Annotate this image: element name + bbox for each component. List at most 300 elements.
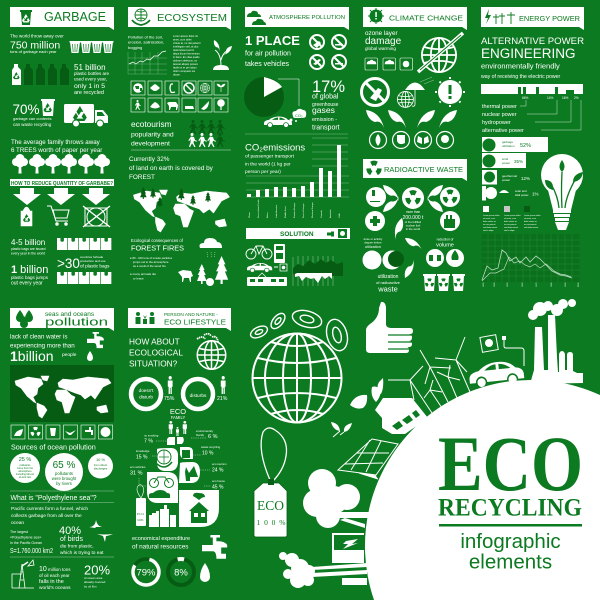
chart: doesn't disturb ring: 75%: [164, 396, 175, 402]
legend: Lorem ipsum dolor: [504, 215, 521, 217]
text: co2 emissions: in the world (1 kg per: [245, 162, 291, 168]
heading: eco lifestyle: [128, 308, 231, 331]
chart labels: Western Europe: [311, 201, 314, 218]
text: power list: hydropower: [482, 120, 511, 126]
chart: emissions grid and bars: [245, 134, 349, 197]
icon: truck: [64, 104, 108, 127]
text: ozone: ozone layer: [365, 30, 398, 37]
legend: Lorem ipsum dolor: [524, 215, 541, 217]
text: expenditure: of natural resources: [132, 544, 188, 550]
text: pollution: erosion, salinization,: [128, 40, 164, 44]
text: polyethylene sea: [10, 491, 114, 557]
icon: big tap: [200, 535, 227, 582]
chart: pollution circles: 65 %: [53, 460, 76, 471]
icon: bike: [246, 246, 272, 259]
chart: energy bars: 52%: [520, 143, 531, 149]
icon: weather tiles: [365, 58, 412, 70]
icon: eco tag small: [136, 485, 146, 526]
icon: organ circles: [370, 132, 454, 148]
text: oil: 20%: [84, 562, 110, 578]
text: polyethylene sea: S=1.760.000 km2: [10, 548, 53, 555]
legend: sed deterruisset: [524, 226, 539, 229]
legend: sit amet, cum: [524, 217, 536, 220]
text: forest fires: ● 80 - 100 tons of smoke particles: [130, 256, 173, 260]
chart: lifestyle labels: no smoking: [144, 434, 159, 438]
text: 51 billion: are recycled: [74, 90, 104, 96]
text: 51 billion: only 1 in 5: [74, 83, 105, 90]
legend: Lorem ipsum dolor: [483, 215, 500, 217]
text: pollution: bogging: [128, 45, 142, 50]
chart: donut 79%: 79%: [136, 568, 156, 578]
text: power list: [482, 104, 524, 134]
text: lorem: intellegam sed, at duo: [173, 44, 199, 48]
chart: lifestyle labels: 7 %: [144, 438, 153, 444]
chart: lifestyle labels: eco tourism: [212, 462, 227, 466]
chart: energy lines: 1900: [483, 282, 485, 287]
text: 17%: transport: [312, 124, 340, 132]
text: co2 emissions: person per year): [245, 169, 281, 175]
text: more than: [403, 210, 424, 231]
chart: lifestyle labels: eco vehicles: [130, 465, 146, 469]
chart: donut 8%: [165, 556, 197, 588]
heading: garbage: GARBAGE: [44, 10, 106, 24]
text: forest: [129, 156, 214, 181]
panel: person and nature: [128, 308, 231, 588]
title: recycling: RECYCLING: [438, 494, 582, 522]
chart: pollution circles: discharges: [94, 466, 108, 470]
icon: hikers: [188, 120, 225, 147]
chart: lifestyle labels: eco house: [212, 479, 225, 483]
chart: energy bars: 12%: [521, 176, 530, 181]
text: oil: falls in the: [39, 579, 64, 585]
panel: eco recycling hero: [249, 299, 600, 600]
chart labels: Australia: [329, 209, 332, 218]
heading: energy: [481, 7, 584, 30]
icon: globe butterflies: [197, 334, 226, 369]
legend: sit amet, cum: [504, 217, 516, 220]
text: sources: Sources of ocean pollution: [11, 442, 96, 452]
chart: energy bars: geothermal: [502, 174, 517, 178]
icon: wind turbines: [388, 337, 470, 413]
text: 17%: 17%: [312, 78, 345, 96]
icon: eco tag: ECO: [257, 499, 284, 514]
text: bags stats: 1 billion: [11, 264, 48, 276]
text: lorem: [173, 34, 201, 76]
chart: energy bars: wind: [502, 157, 509, 161]
chart: disturbs ring: [183, 376, 228, 409]
text: oil: world's oceans: [39, 585, 71, 591]
text: 70%: can waste recycling: [13, 122, 52, 127]
text: utilization: dose or activity: [364, 237, 383, 241]
chart labels: Eastern Europe: [293, 202, 296, 218]
icon: house: [375, 398, 428, 434]
chart: pollution circles: 10 %: [96, 457, 105, 462]
text: lorem: aliqui dicunt fermentum: [173, 52, 200, 56]
chart: disturbs ring: disturbs: [190, 393, 207, 399]
text: how about: [129, 336, 183, 368]
icon: leaves: [331, 378, 383, 437]
text: ecotourism: development: [131, 140, 170, 148]
chart: lifestyle labels: friendly: [196, 434, 205, 437]
legend: sed in aliqui: [483, 230, 494, 232]
text: power list: thermal power: [482, 104, 517, 110]
icon: large globe: [252, 334, 342, 422]
chart: energy bars: power: [502, 161, 510, 165]
icon: factory smoke: [279, 552, 367, 588]
icon: can: [41, 99, 55, 116]
legend: sit amet, cum: [483, 217, 495, 220]
text: polyethylene sea: The largest: [10, 530, 28, 534]
icon: butterflies: [249, 307, 351, 353]
chart: energy lines: 1960: [522, 282, 524, 287]
chart: energy bars: [482, 137, 548, 200]
text: oil: already covered: [84, 580, 106, 584]
chart: disturbs ring: 21%: [217, 396, 228, 402]
text: polyethylene sea: Pacific currents form a funnel, which: [11, 506, 88, 512]
icon: eco tag small: ECO: [137, 512, 144, 516]
icon grid: [131, 81, 228, 112]
text: co2 emissions: of passenger transport: [245, 154, 295, 160]
legend: no nisi petenti: [504, 223, 517, 226]
white circle: [365, 380, 600, 600]
chart: energy bars: 1%: [532, 192, 539, 196]
text: 750 million: 750 million: [10, 40, 60, 52]
icon: tap: [87, 332, 104, 361]
chart: lifestyle labels: waste recycling: [201, 445, 221, 449]
text: lorem: dolorum delectus, no: [173, 58, 198, 62]
panel: radioactive waste: [362, 159, 467, 294]
text: 51 billion: 51 billion: [74, 63, 106, 72]
icon: cloud and trees: [178, 238, 228, 286]
chart: energy lines: 1920: [494, 282, 496, 287]
chart: pollution circles: from direct: [94, 463, 107, 467]
divider: [439, 524, 582, 526]
text: 750 million: The world throw away over: [10, 34, 64, 38]
chart: lifestyle labels: 24 %: [212, 468, 224, 474]
icon: thumbs up: [366, 302, 413, 353]
text: polyethylene sea: in the Pacific Ocean: [10, 541, 42, 545]
legend: dolet virtute at,: [483, 220, 497, 223]
text: 17%: gases: [312, 105, 335, 115]
chart: pollution circles: pollutants: [20, 464, 31, 467]
icon: leaf arrows: [366, 110, 457, 128]
text: pollution: [128, 34, 164, 50]
legend: sed in aliqui: [504, 230, 515, 232]
band: solution: SOLUTION: [280, 231, 314, 238]
chart: lifestyle labels: 31 %: [130, 470, 143, 476]
text: co2 emissions: [245, 142, 305, 175]
text: alternative power: environmentally friendly: [481, 62, 560, 70]
chart: pollution circles: of acid rain: [19, 476, 32, 479]
chart: pollution circles: come from the: [17, 467, 34, 470]
icon: factory: [528, 299, 583, 384]
text: lorem: Lorem ipsum dolor sit: [173, 34, 198, 38]
text: how about: ECOLOGICAL: [129, 348, 183, 358]
text: lorem: virtute at, no nisi petenti: [173, 41, 201, 45]
text: more than: more than: [406, 210, 420, 214]
icon: volume circles: [426, 249, 464, 267]
chart: energy lines: 1970: [536, 282, 538, 287]
map: world: [10, 365, 114, 422]
heading: atmosphere: [245, 7, 349, 30]
icon: birds: [89, 520, 113, 542]
panel: ecosystem: [128, 7, 232, 286]
text: lorem: laoreet aliquip ponere: [173, 62, 199, 66]
text: clean water: lack of clean water is: [10, 334, 67, 340]
text: bags stats: [11, 238, 110, 286]
text: bags stats: plastic bags are issued: [11, 247, 46, 251]
text: ozone: damage: [365, 36, 402, 47]
text: utilization: utilization: [378, 274, 399, 280]
chart: energy bars: utilization: [502, 144, 515, 148]
text: utilization: degree before: [364, 240, 382, 244]
text: oil: of oil each year: [39, 573, 70, 578]
text: polyethylene sea: «Polyethylene sea»: [10, 536, 41, 540]
icon: power plant: [332, 533, 364, 563]
chart labels: [249, 198, 341, 218]
chart: solution: [293, 256, 343, 286]
icon: no aerosol: [362, 78, 388, 106]
text: ecotourism: popularity and: [131, 132, 174, 138]
text: utilization: of radioactive: [376, 280, 401, 285]
text: 17%: greenhouse: [312, 102, 339, 108]
text: six trees: The average family throws away: [11, 139, 101, 146]
band: how to reduce: HOW TO REDUCE QUANTITY OF GARBABE?: [11, 181, 114, 187]
chart: energy lines: [482, 234, 580, 287]
text: oil: 10 million tons: [39, 566, 71, 573]
chart: doesn't disturb ring: disturb: [139, 394, 153, 400]
text: forest fires: ● many animals die: [130, 272, 156, 276]
text: 51 billion: [74, 63, 110, 96]
text: alternative power: ALTERNATIVE POWER: [481, 36, 584, 47]
text: expenditure: economical expenditure: [132, 536, 190, 542]
chart: pollution circles: [10, 453, 113, 491]
chart: energy lines: 1980: [551, 282, 553, 287]
chart: pollution circles: were brought: [52, 476, 77, 481]
subtitle: infographic elements: elements: [469, 550, 552, 574]
text: how about: HOW ABOUT: [129, 336, 180, 346]
text: alternative power: ENGINEERING: [481, 46, 576, 61]
icon: bulb: [541, 154, 583, 230]
text: eco family: [170, 407, 186, 420]
icon: moon circles: [362, 250, 404, 270]
text: 40% of birds: which is trying to eat: [60, 550, 104, 556]
text: 17%: emission -: [312, 117, 337, 123]
chart: energy bars: garbage: [502, 140, 513, 144]
text: forest fires: as a result of the wood fire: [133, 264, 166, 268]
text: ecotourism: ecotourism: [131, 119, 172, 129]
text: clean water: 1billion: [10, 348, 54, 364]
chart labels: Rest of Europe: [302, 203, 305, 218]
heading: seas: seas and oceans: [45, 311, 95, 318]
icon: solar panel: [338, 439, 398, 479]
chart: lifestyle labels: environmentaly: [196, 430, 214, 433]
text: 17%: [312, 78, 345, 132]
icon: plastic bags: [57, 238, 111, 284]
text: bags stats: >30: [57, 256, 80, 271]
text: forest fires: jumps out to the atmosphere: [132, 260, 169, 264]
text: 51 billion: used every year,: [74, 76, 107, 82]
text: alternative power: way of receiving the electric power: [481, 74, 561, 80]
icon: eco tag: [254, 428, 287, 537]
legend: sed deterruisset: [504, 226, 519, 229]
band: solution: [246, 228, 350, 239]
text: ozone: [365, 30, 402, 51]
chart: donut 79%: [130, 556, 162, 588]
text: more than: nuclear fuel: [406, 224, 421, 228]
chart: pollution circles: atmosphere: [18, 470, 32, 473]
text: oil: [39, 562, 110, 591]
chart: doesn't disturb ring: [131, 376, 175, 409]
text: lorem: deterruisset sed in: [173, 48, 195, 52]
icon: co2 cloud: CO₂: [295, 113, 303, 118]
text: forest: FOREST: [129, 174, 155, 181]
chart labels: China: [249, 212, 251, 218]
chart: pollution circles: by rivers: [56, 481, 72, 486]
text: lorem: in bans. Ex vitae qualis: [173, 55, 200, 59]
text: 70%: 70%: [12, 102, 40, 117]
heading: eco lifestyle: ECO LIFESTYLE: [164, 320, 226, 326]
text: oil: by oil film: [84, 584, 97, 588]
band: how to reduce: [10, 179, 114, 187]
chart: doesn't disturb ring: doesn't: [139, 388, 154, 393]
text: alternative power: [481, 36, 584, 80]
chart: energy lines: 1950: [507, 282, 509, 287]
text: how about: SITUATION?: [129, 358, 178, 368]
heading: ecosystem: ECOSYSTEM: [157, 13, 227, 24]
icon: tram: [247, 273, 287, 286]
text: polyethylene sea: collects garbage from all over the: [11, 513, 82, 519]
chart labels: USA: [338, 213, 341, 218]
chart: lifestyle labels: 6 %: [208, 434, 218, 440]
heading: seas: pollution: [45, 316, 108, 328]
labels: percentages: 66%: [522, 96, 529, 100]
icon: no signs: [310, 35, 346, 69]
icon: cups: [70, 41, 114, 53]
text: forest fires: Ecological consequences of: [131, 238, 184, 243]
text: utilization: [364, 237, 454, 294]
text: 17%: of global: [312, 94, 339, 100]
text: 1 place: [245, 33, 300, 68]
chart: pollution circles: pollutants: [55, 471, 73, 476]
chart: energy lines: 2000: [578, 282, 580, 287]
text: power list: alternative power: [482, 128, 524, 134]
text: forest fires: [130, 238, 184, 280]
text: bags stats: every year in the world: [11, 252, 45, 256]
connectors: [520, 100, 581, 130]
chart labels: Middle East: [284, 206, 287, 218]
connector: [278, 79, 299, 106]
text: 1 place: 1 PLACE: [245, 33, 300, 48]
text: 750 million: tons of garbage each year: [10, 49, 57, 54]
subtitle: infographic elements: infographic: [460, 530, 561, 553]
text: 51 billion: plastic bottles are: [74, 71, 110, 76]
text: 40% of birds: 40%: [59, 525, 81, 537]
icon: trees row: [12, 154, 110, 174]
icon: plant: [211, 40, 232, 70]
panel: seas and oceans: [10, 308, 114, 591]
text: 70%: garbage can contents: [13, 116, 51, 121]
text: pollution: Pollution of the soil,: [128, 34, 163, 40]
arrows: down: [13, 188, 110, 205]
text: six trees: 6 TREES worth of paper per year: [11, 147, 102, 154]
text: forest: Currently 32%: [129, 156, 170, 163]
icon: co2 cloud: [290, 109, 306, 122]
chart labels: Rest of Asia Pacific: [257, 198, 260, 218]
icon: family: [169, 421, 187, 436]
text: more than: 200.000 t: [403, 215, 424, 221]
text: 70%: [12, 102, 52, 127]
chart: lifestyle labels: 45 %: [212, 484, 224, 490]
chart: donut 8%: 8%: [174, 568, 188, 578]
heading: atmosphere: ATMOSPHERE POLLUTION: [269, 15, 345, 21]
icon: solution car: [247, 263, 287, 272]
icon: car: [264, 116, 292, 127]
panel: garbage: [10, 7, 114, 286]
icon: bag: [21, 207, 32, 226]
labels: percentages: 16%: [562, 96, 569, 100]
chart: energy bars: power: [502, 178, 510, 182]
world map: [134, 187, 230, 232]
text: eco family: ECO: [170, 407, 186, 416]
text: six trees: [11, 139, 102, 154]
text: forest: of land on earth is covered by: [129, 165, 214, 172]
icon: cart: [47, 206, 69, 225]
chart: lifestyle labels: 15 %: [136, 454, 148, 460]
chart: lifestyle labels: [130, 430, 227, 490]
text: more than: of the fulfilled: [405, 220, 422, 224]
text: bags stats: plastic bags jumps: [11, 275, 49, 280]
heading: radioactive: RADIOACTIVE WASTE: [384, 167, 463, 174]
icon: electric car: [468, 335, 525, 389]
text: ecotourism: [131, 119, 174, 148]
legend: dolet virtute at,: [524, 220, 538, 223]
heading: ecosystem: [128, 7, 231, 30]
chart labels: Africa: [266, 212, 269, 218]
chart: energy bars: solar and: [515, 189, 527, 193]
text: bags stats: countries forbade: [80, 255, 104, 259]
icon: eco tag: 100%: [256, 518, 286, 527]
text: oil: of ocean area: [84, 576, 103, 580]
text: 750 million: [10, 34, 64, 54]
legend: no nisi petenti: [524, 223, 537, 226]
subtitle: infographic elements: [460, 530, 561, 574]
icon: globe thermometer: [418, 33, 463, 72]
chart: line: [128, 51, 167, 74]
panel: atmosphere pollution: [244, 7, 350, 286]
text: lorem: amet, cum dolet: [173, 38, 192, 42]
text: forest fires: or leave: [133, 276, 144, 280]
heading: garbage: [10, 7, 114, 30]
text: utilization: utilization: [365, 245, 381, 249]
text: expenditure: [132, 536, 190, 550]
text: bags stats: out every year: [11, 280, 43, 286]
icon: tree: [303, 469, 370, 528]
icon row: [11, 425, 112, 439]
text: 40% of birds: [59, 525, 104, 556]
text: co2 emissions: CO₂emissions: [245, 142, 305, 154]
chart: leaf tiles: [147, 437, 219, 527]
text: bags stats: of plastic bags: [80, 264, 110, 268]
text: more than: in the world: [406, 227, 421, 231]
panel: energy power: [481, 7, 584, 287]
legend: [483, 206, 541, 232]
text: 40% of birds: of birds: [60, 536, 83, 543]
heading: seas: [10, 308, 114, 331]
text: ozone: global warming: [365, 46, 396, 51]
icon: bottles: [12, 64, 69, 85]
text: power list: nuclear power: [482, 112, 517, 118]
